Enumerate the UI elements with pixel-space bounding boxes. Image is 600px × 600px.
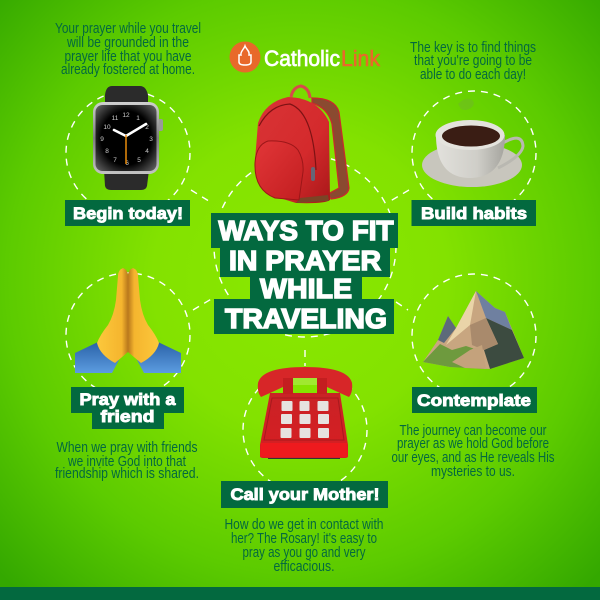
text block: contemplate description — [392, 423, 554, 480]
label: begin today — [65, 200, 190, 226]
title panel: WAYS TO FIT — [218, 215, 394, 246]
icon: watch: 10 — [103, 124, 111, 131]
label: pray with a friend — [71, 387, 184, 429]
text block: build habits description: The key is to find things — [410, 40, 536, 56]
label: call your mother: Call your Mother! — [230, 485, 380, 504]
logo: CatholicLink: Catholic — [264, 46, 340, 71]
text block: build habits description — [410, 40, 536, 83]
title panel — [211, 213, 398, 334]
title panel: WHILE — [260, 273, 352, 304]
logo: CatholicLink: Link — [341, 46, 381, 71]
text block: call your mother description — [224, 517, 384, 575]
icon: watch: 12 — [122, 112, 130, 119]
text block: pray with a friend description — [55, 440, 199, 482]
icon: watch — [93, 86, 163, 190]
text block: call your mother description: efficacious. — [274, 559, 334, 575]
icon: mountain — [423, 291, 524, 369]
label: pray with a friend: friend — [100, 407, 154, 426]
icon: watch: 4 — [145, 148, 149, 155]
icon: watch: 3 — [149, 136, 153, 143]
text block: begin today description: will be grounded in the — [66, 35, 189, 51]
label: build habits: Build habits — [421, 204, 527, 223]
text block: pray with a friend description: friendship which is shared. — [55, 466, 199, 482]
dashed connector network — [66, 91, 536, 492]
bottom bar — [0, 587, 600, 600]
text block: begin today description: prayer life that you have — [64, 49, 192, 65]
text block: begin today description: Your prayer while you travel — [55, 21, 201, 37]
icon: coffee cup — [422, 99, 523, 187]
logo: CatholicLink — [230, 42, 381, 72]
icon: watch: 6 — [125, 160, 129, 167]
icon: watch: 2 — [145, 124, 149, 131]
icon: watch: 5 — [137, 157, 141, 164]
label: call your mother — [221, 481, 388, 508]
text block: begin today description — [55, 21, 201, 78]
label: contemplate — [412, 387, 537, 413]
label: contemplate: Contemplate — [417, 391, 531, 410]
icon: watch: 7 — [113, 157, 117, 164]
text block: call your mother description: pray as you go and very — [242, 545, 366, 561]
text block: call your mother description: How do we get in contact with — [224, 517, 384, 533]
icon: praying hands — [75, 268, 181, 373]
text block: build habits description: that you're going to be — [414, 53, 532, 69]
text block: contemplate description: our eyes, and as He reveals His — [392, 450, 554, 466]
text block: build habits description: able to do each day! — [420, 67, 526, 83]
icon: watch: 9 — [100, 136, 104, 143]
text block: contemplate description: prayer as we hold God before — [397, 436, 549, 452]
text block: pray with a friend description: we invite God into that — [67, 454, 186, 470]
title panel: TRAVELING — [225, 303, 387, 334]
icon: watch: 1 — [136, 115, 140, 122]
icon: telephone — [258, 367, 352, 459]
text block: call your mother description: her? The Rosary! it's easy to — [231, 531, 377, 547]
text block: contemplate description: mysteries to us. — [431, 464, 515, 480]
text block: begin today description: already fostered at home. — [61, 62, 195, 78]
title panel: IN PRAYER — [229, 245, 381, 276]
icon: watch: 11 — [112, 115, 119, 122]
icon: backpack — [255, 86, 349, 203]
label: build habits — [412, 200, 536, 226]
text block: contemplate description: The journey can become our — [400, 423, 547, 439]
icon: watch: 8 — [105, 148, 109, 155]
label: pray with a friend: Pray with a — [80, 390, 176, 409]
label: begin today: Begin today! — [73, 204, 183, 223]
text block: pray with a friend description: When we pray with friends — [56, 440, 198, 456]
